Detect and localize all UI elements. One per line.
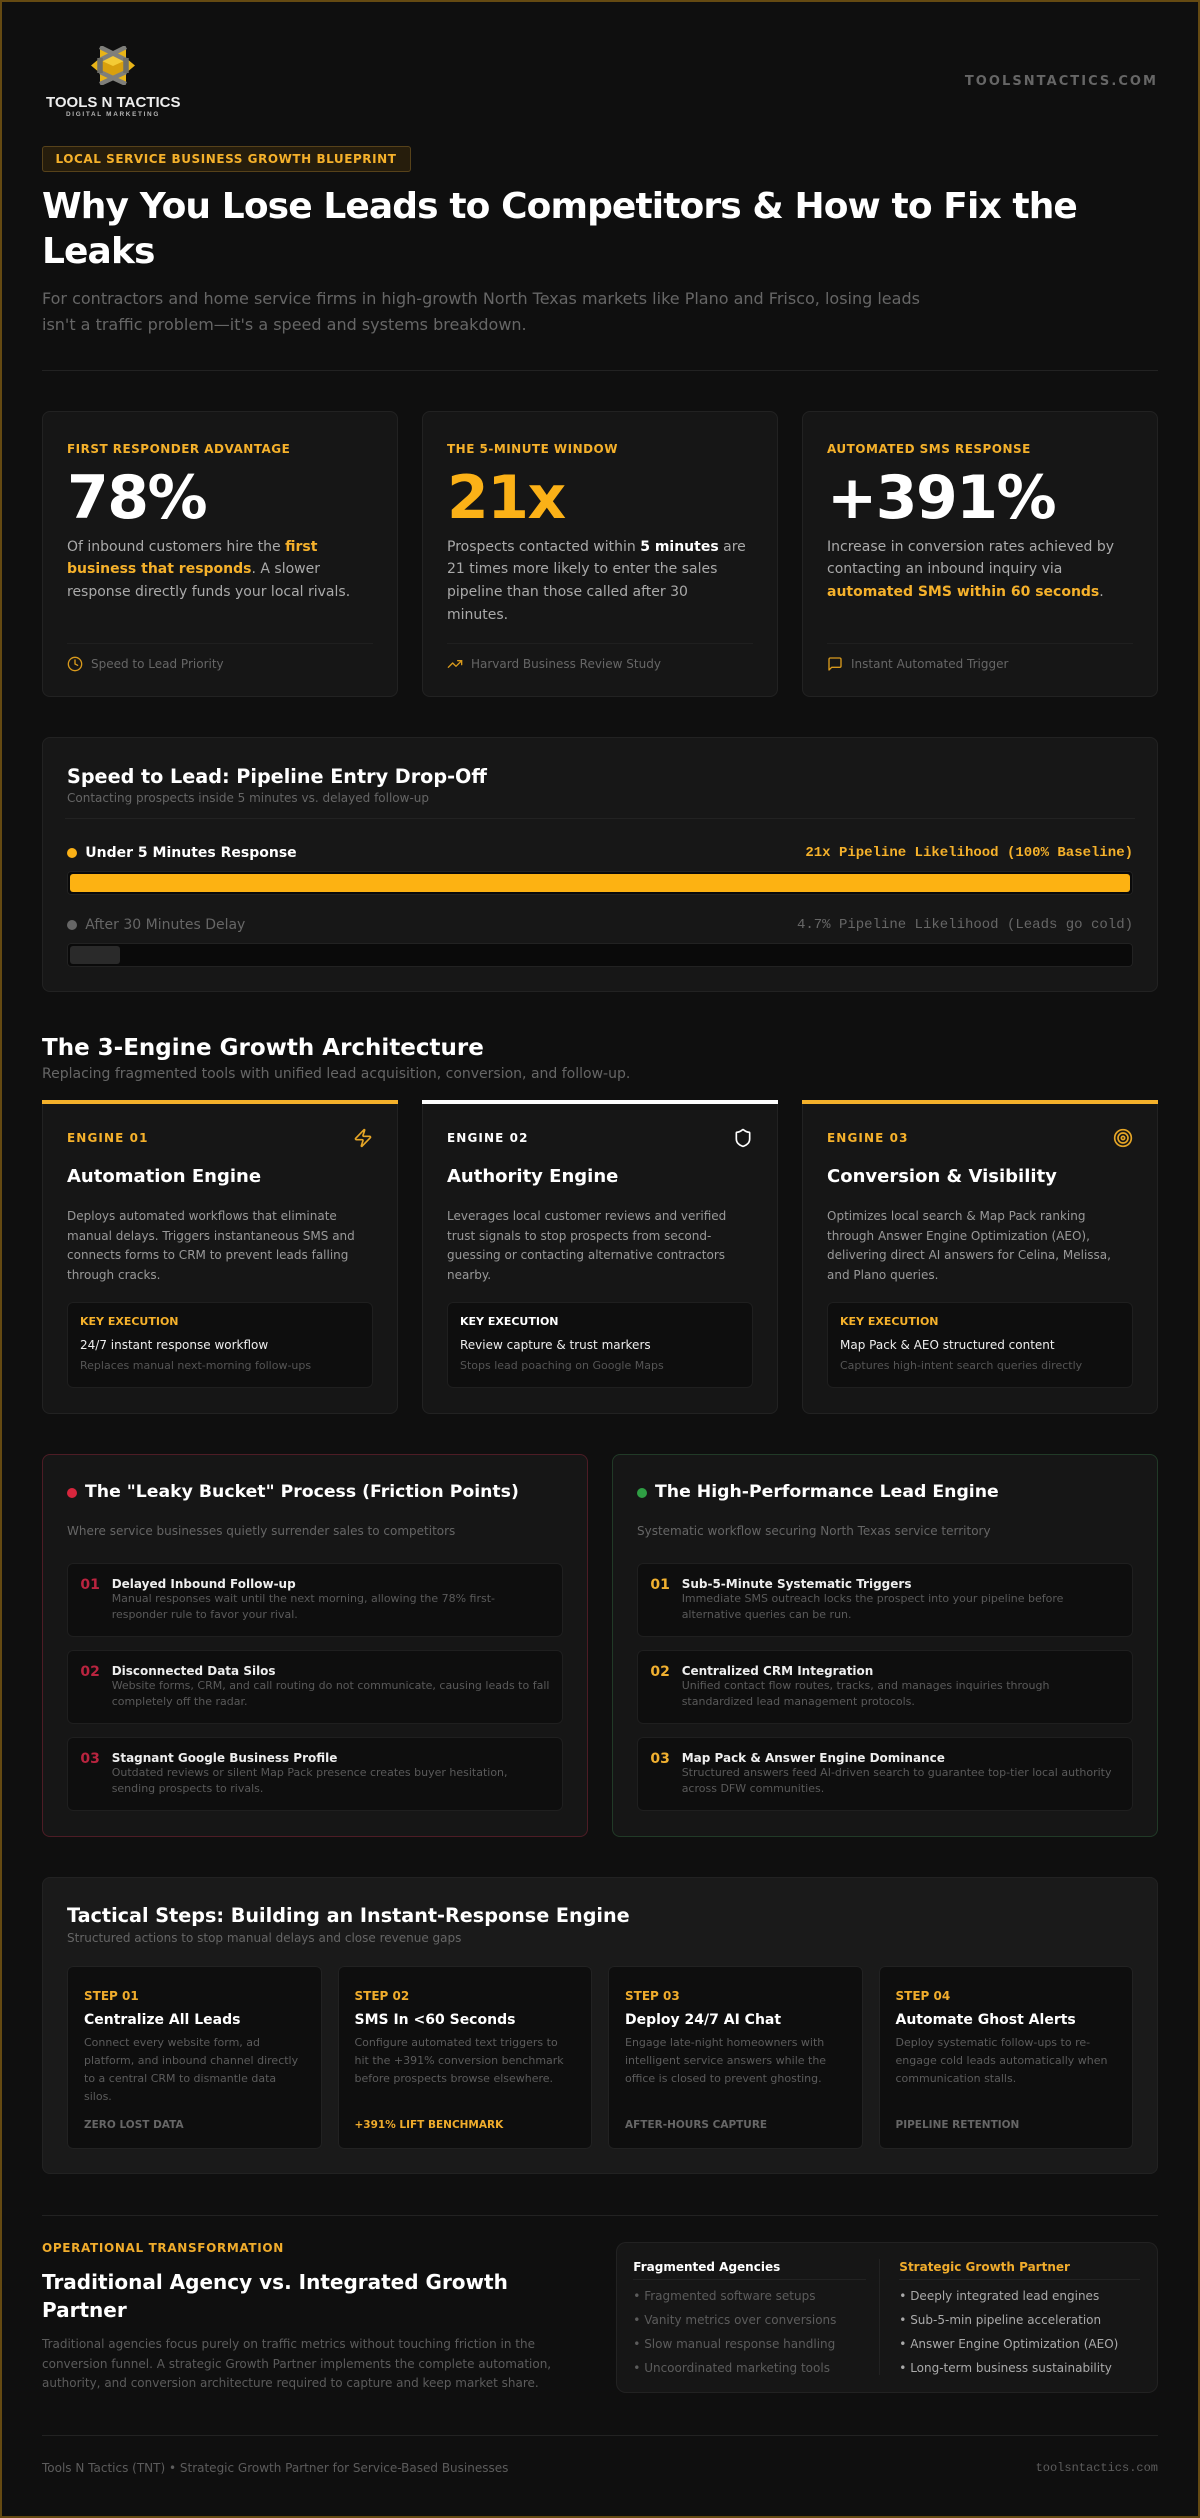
site url: TOOLSNTACTICS.COM bbox=[965, 74, 1158, 89]
item description bbox=[112, 1592, 495, 1621]
bar: after thirty minutes bbox=[67, 943, 1133, 967]
chart subtitle: Contacting prospects inside 5 minutes vs. delayed follow-up bbox=[67, 791, 429, 805]
step description: Engage late-night homeowners with bbox=[625, 2036, 824, 2049]
stat label: FIRST RESPONDER ADVANTAGE bbox=[67, 442, 290, 456]
icon: logo star bbox=[91, 46, 135, 85]
badge bbox=[42, 146, 411, 172]
tactical subtitle: Structured actions to stop manual delays and close revenue gaps bbox=[67, 1931, 461, 1945]
status dot: green bbox=[637, 1488, 647, 1498]
item description bbox=[682, 1592, 1063, 1621]
step tag: +391% LIFT BENCHMARK bbox=[354, 2119, 503, 2131]
panel: engine 03 bbox=[802, 1100, 1158, 1414]
stat description: pipeline than those called after 30 bbox=[447, 584, 688, 600]
icon: clock bbox=[68, 656, 82, 672]
text block: operational transformation bbox=[42, 2241, 551, 2390]
stat description: Increase in conversion rates achieved by bbox=[827, 539, 1114, 555]
panel: stat automated sms bbox=[802, 411, 1158, 697]
item title: Map Pack & Answer Engine Dominance bbox=[682, 1751, 945, 1765]
stat label: THE 5-MINUTE WINDOW bbox=[447, 442, 618, 456]
engine description bbox=[67, 1209, 355, 1282]
status dot: red bbox=[67, 1488, 77, 1498]
panel: engine 02 bbox=[422, 1100, 778, 1414]
stat number: 78% bbox=[67, 463, 206, 533]
panel title: The "Leaky Bucket" Process (Friction Points) bbox=[85, 1482, 519, 1502]
item description bbox=[112, 1766, 508, 1795]
stat description: automated SMS within 60 seconds. bbox=[827, 584, 1104, 600]
icon: lightning bbox=[354, 1128, 372, 1148]
key note: Replaces manual next-morning follow-ups bbox=[80, 1359, 311, 1372]
step tag: ZERO LOST DATA bbox=[84, 2119, 184, 2131]
step description bbox=[896, 2036, 1108, 2085]
logo tagline: DIGITAL MARKETING bbox=[66, 111, 160, 118]
item title: Stagnant Google Business Profile bbox=[112, 1751, 337, 1765]
chart title: Speed to Lead: Pipeline Entry Drop-Off bbox=[67, 765, 487, 788]
stat description: Prospects contacted within 5 minutes are bbox=[447, 539, 746, 555]
engine description: delivering direct AI answers for Celina, Melissa, bbox=[827, 1248, 1111, 1262]
step title: Deploy 24/7 AI Chat bbox=[625, 2012, 781, 2028]
item number: 02 bbox=[80, 1664, 100, 1680]
engine description: nearby. bbox=[447, 1268, 491, 1282]
item description: Unified contact flow routes, tracks, and manages inquiries through bbox=[682, 1679, 1049, 1692]
friction item 02 bbox=[67, 1650, 563, 1724]
step description: hit the +391% conversion benchmark bbox=[354, 2054, 564, 2067]
stat source: Speed to Lead Priority bbox=[91, 657, 224, 671]
item number: 03 bbox=[80, 1751, 100, 1767]
step description bbox=[625, 2036, 826, 2085]
stat description bbox=[827, 539, 1114, 600]
list: fragmented agencies: • Fragmented software setups bbox=[633, 2289, 815, 2303]
item title: Sub-5-Minute Systematic Triggers bbox=[682, 1577, 911, 1591]
list: fragmented agencies bbox=[633, 2289, 836, 2375]
stat source: Instant Automated Trigger bbox=[851, 657, 1008, 671]
step tag: AFTER-HOURS CAPTURE bbox=[625, 2119, 767, 2131]
stat description: Of inbound customers hire the first bbox=[67, 539, 317, 555]
friction item 03 bbox=[67, 1737, 563, 1811]
step title: SMS In <60 Seconds bbox=[354, 2012, 515, 2028]
logo bbox=[46, 46, 180, 118]
stat number: +391% bbox=[827, 463, 1055, 533]
panel: comparison bbox=[616, 2242, 1158, 2393]
heading: Partner bbox=[42, 2298, 127, 2322]
engine description: Deploys automated workflows that eliminate bbox=[67, 1209, 337, 1223]
engine description bbox=[827, 1209, 1111, 1282]
bar label: after thirty minutes: After 30 Minutes Delay bbox=[85, 917, 245, 933]
item description: completely off the radar. bbox=[112, 1695, 247, 1708]
list: fragmented agencies: • Vanity metrics over conversions bbox=[633, 2313, 836, 2327]
eyebrow: OPERATIONAL TRANSFORMATION bbox=[42, 2241, 284, 2255]
description: authority, and conversion architecture required to capture and keep market share. bbox=[42, 2376, 539, 2390]
bar fill bbox=[70, 874, 1130, 892]
step title: Automate Ghost Alerts bbox=[896, 2012, 1076, 2028]
description bbox=[42, 2337, 551, 2390]
engine title: Automation Engine bbox=[67, 1166, 261, 1187]
engine description: Leverages local customer reviews and verified bbox=[447, 1209, 726, 1223]
engine description bbox=[447, 1209, 726, 1282]
legend dot: after thirty minutes bbox=[67, 920, 77, 930]
step title: Centralize All Leads bbox=[84, 2012, 240, 2028]
step label: STEP 02 bbox=[354, 1989, 409, 2003]
key label: KEY EXECUTION bbox=[80, 1315, 179, 1328]
friction item 01 bbox=[67, 1563, 563, 1637]
list: fragmented agencies: • Slow manual response handling bbox=[633, 2337, 835, 2351]
subtitle: isn't a traffic problem—it's a speed and systems breakdown. bbox=[42, 315, 527, 334]
subheading: engines: Replacing fragmented tools with unified lead acquisition, conversion, and follow-up. bbox=[42, 1066, 630, 1082]
key label: KEY EXECUTION bbox=[840, 1315, 939, 1328]
engine item 03 bbox=[637, 1737, 1133, 1811]
step description: Deploy systematic follow-ups to re- bbox=[896, 2036, 1090, 2049]
title: Why You Lose Leads to Competitors & How to Fix the bbox=[42, 186, 1077, 227]
item title: Centralized CRM Integration bbox=[682, 1664, 873, 1678]
heading: Traditional Agency vs. Integrated Growth bbox=[42, 2270, 508, 2294]
step description: silos. bbox=[84, 2090, 112, 2103]
title: Leaks bbox=[42, 231, 155, 272]
key action: Review capture & trust markers bbox=[460, 1338, 651, 1352]
item description: across DFW communities. bbox=[682, 1782, 824, 1795]
engine description: manual delays. Triggers instantaneous SMS and bbox=[67, 1229, 355, 1243]
step label: STEP 03 bbox=[625, 1989, 680, 2003]
panel: engine 01 bbox=[42, 1100, 398, 1414]
stat number: 21x bbox=[447, 463, 565, 533]
item title: Disconnected Data Silos bbox=[112, 1664, 276, 1678]
icon: target bbox=[1114, 1128, 1132, 1148]
step description bbox=[354, 2036, 564, 2085]
engine description: trust signals to stop prospects from second- bbox=[447, 1229, 711, 1243]
item description: alternative queries can be run. bbox=[682, 1608, 852, 1621]
step description: intelligent service answers while the bbox=[625, 2054, 826, 2067]
stat description: response directly funds your local rivals. bbox=[67, 584, 350, 600]
panel subtitle: Where service businesses quietly surrender sales to competitors bbox=[67, 1524, 455, 1538]
engine item 01 bbox=[637, 1563, 1133, 1637]
bar: under five minutes bbox=[67, 871, 1133, 895]
title bbox=[42, 186, 1077, 272]
step description: communication stalls. bbox=[896, 2072, 1016, 2085]
engine description: through Answer Engine Optimization (AEO), bbox=[827, 1229, 1090, 1243]
list: strategic growth partner: • Deeply integrated lead engines bbox=[899, 2289, 1099, 2303]
step description: Connect every website form, ad bbox=[84, 2036, 260, 2049]
footer url: toolsntactics.com bbox=[1036, 2460, 1158, 2474]
key action: 24/7 instant response workflow bbox=[80, 1338, 268, 1352]
heading bbox=[42, 2270, 508, 2322]
engine description: Optimizes local search & Map Pack ranking bbox=[827, 1209, 1085, 1223]
engine description: connects forms to CRM to prevent leads falling bbox=[67, 1248, 348, 1262]
item description: Outdated reviews or silent Map Pack presence creates buyer hesitation, bbox=[112, 1766, 508, 1779]
key action: Map Pack & AEO structured content bbox=[840, 1338, 1055, 1352]
item description: Manual responses wait until the next morning, allowing the 78% first- bbox=[112, 1592, 495, 1605]
bar value: under five minutes: 21x Pipeline Likelihood (100% Baseline) bbox=[805, 845, 1133, 861]
heading: engines: The 3-Engine Growth Architecture bbox=[42, 1035, 484, 1061]
icon: message bbox=[828, 657, 842, 671]
badge text: LOCAL SERVICE BUSINESS GROWTH BLUEPRINT bbox=[56, 152, 396, 166]
icon: shield bbox=[736, 1128, 750, 1148]
stat description: minutes. bbox=[447, 607, 508, 623]
engine tag: ENGINE 01 bbox=[67, 1131, 149, 1145]
list: strategic growth partner bbox=[899, 2289, 1118, 2375]
step label: STEP 01 bbox=[84, 1989, 139, 2003]
item description: responder rule to favor your rival. bbox=[112, 1608, 298, 1621]
item description: sending prospects to rivals. bbox=[112, 1782, 263, 1795]
stat description bbox=[67, 539, 350, 600]
step 02 bbox=[338, 1966, 592, 2149]
stat source: Harvard Business Review Study bbox=[471, 657, 661, 671]
subtitle bbox=[42, 289, 920, 334]
subtitle: For contractors and home service firms in high-growth North Texas markets like Plano and Frisco, losing leads bbox=[42, 289, 920, 308]
panel: high performance engine bbox=[612, 1454, 1158, 1837]
column heading: strategic growth partner: Strategic Growth Partner bbox=[899, 2260, 1070, 2274]
item number: 01 bbox=[80, 1577, 100, 1593]
stat label: AUTOMATED SMS RESPONSE bbox=[827, 442, 1031, 456]
stat description bbox=[447, 539, 746, 623]
key execution box bbox=[827, 1302, 1133, 1388]
key label: KEY EXECUTION bbox=[460, 1315, 559, 1328]
column heading: fragmented agencies: Fragmented Agencies bbox=[633, 2260, 780, 2274]
step description: office is closed to prevent ghosting. bbox=[625, 2072, 822, 2085]
legend dot: under five minutes bbox=[67, 848, 77, 858]
list: fragmented agencies: • Uncoordinated marketing tools bbox=[633, 2361, 830, 2375]
list: strategic growth partner: • Long-term business sustainability bbox=[899, 2361, 1112, 2375]
item number: 03 bbox=[650, 1751, 670, 1767]
item description: Website forms, CRM, and call routing do not communicate, causing leads to fall bbox=[112, 1679, 549, 1692]
list: strategic growth partner: • Answer Engine Optimization (AEO) bbox=[899, 2337, 1118, 2351]
list: strategic growth partner: • Sub-5-min pipeline acceleration bbox=[899, 2313, 1101, 2327]
bar value: after thirty minutes: 4.7% Pipeline Likelihood (Leads go cold) bbox=[797, 917, 1133, 933]
footer text: Tools N Tactics (TNT) • Strategic Growth Partner for Service-Based Businesses bbox=[42, 2460, 508, 2474]
tactical title: Tactical Steps: Building an Instant-Response Engine bbox=[67, 1904, 630, 1927]
step description: platform, and inbound channel directly bbox=[84, 2054, 298, 2067]
bar fill bbox=[70, 946, 120, 964]
step 01 bbox=[67, 1966, 322, 2149]
step description: before prospects browse elsewhere. bbox=[354, 2072, 553, 2085]
key execution box bbox=[67, 1302, 373, 1388]
panel: leaky bucket bbox=[42, 1454, 588, 1837]
description: Traditional agencies focus purely on traffic metrics without touching friction in the bbox=[42, 2337, 535, 2351]
panel title: The High-Performance Lead Engine bbox=[655, 1482, 999, 1502]
description: conversion funnel. A strategic Growth Partner implements the complete automation, bbox=[42, 2357, 551, 2371]
item description bbox=[682, 1679, 1049, 1708]
step tag: PIPELINE RETENTION bbox=[896, 2119, 1019, 2131]
item description bbox=[112, 1679, 549, 1708]
key note: Captures high-intent search queries directly bbox=[840, 1359, 1082, 1372]
key note: Stops lead poaching on Google Maps bbox=[460, 1359, 664, 1372]
item description: Immediate SMS outreach locks the prospect into your pipeline before bbox=[682, 1592, 1063, 1605]
engine description: and Plano queries. bbox=[827, 1268, 938, 1282]
engine description: through cracks. bbox=[67, 1268, 160, 1282]
engine title: Authority Engine bbox=[447, 1166, 618, 1187]
logo wordmark: TOOLS N TACTICS bbox=[46, 94, 180, 111]
stat description: 21 times more likely to enter the sales bbox=[447, 561, 717, 577]
step description: engage cold leads automatically when bbox=[896, 2054, 1108, 2067]
panel: stat five minute window bbox=[422, 411, 778, 697]
step 03 bbox=[608, 1966, 862, 2149]
engine tag: ENGINE 02 bbox=[447, 1131, 529, 1145]
step 04 bbox=[878, 1966, 1133, 2149]
engine tag: ENGINE 03 bbox=[827, 1131, 909, 1145]
item description bbox=[682, 1766, 1112, 1795]
item number: 02 bbox=[650, 1664, 670, 1680]
key execution box bbox=[447, 1302, 753, 1388]
item number: 01 bbox=[650, 1577, 670, 1593]
item description: standardized lead management protocols. bbox=[682, 1695, 915, 1708]
engine title: Conversion & Visibility bbox=[827, 1166, 1057, 1187]
stat description: contacting an inbound inquiry via bbox=[827, 561, 1062, 577]
panel: stat first responder bbox=[42, 411, 398, 697]
panel subtitle: Systematic workflow securing North Texas service territory bbox=[637, 1524, 991, 1538]
step label: STEP 04 bbox=[896, 1989, 950, 2003]
icon: trending up bbox=[448, 660, 462, 668]
panel: speed to lead chart bbox=[42, 737, 1158, 992]
engine item 02 bbox=[637, 1650, 1133, 1724]
step description: to a central CRM to dismantle data bbox=[84, 2072, 276, 2085]
bar label: under five minutes: Under 5 Minutes Response bbox=[85, 845, 297, 861]
item title: Delayed Inbound Follow-up bbox=[112, 1577, 296, 1591]
engine description: guessing or contacting alternative contractors bbox=[447, 1248, 725, 1262]
step description bbox=[84, 2036, 298, 2103]
item description: Structured answers feed AI-driven search to guarantee top-tier local authority bbox=[682, 1766, 1111, 1779]
stat description: business that responds. A slower bbox=[67, 561, 320, 577]
panel: tactical steps bbox=[42, 1877, 1158, 2174]
step description: Configure automated text triggers to bbox=[354, 2036, 558, 2049]
